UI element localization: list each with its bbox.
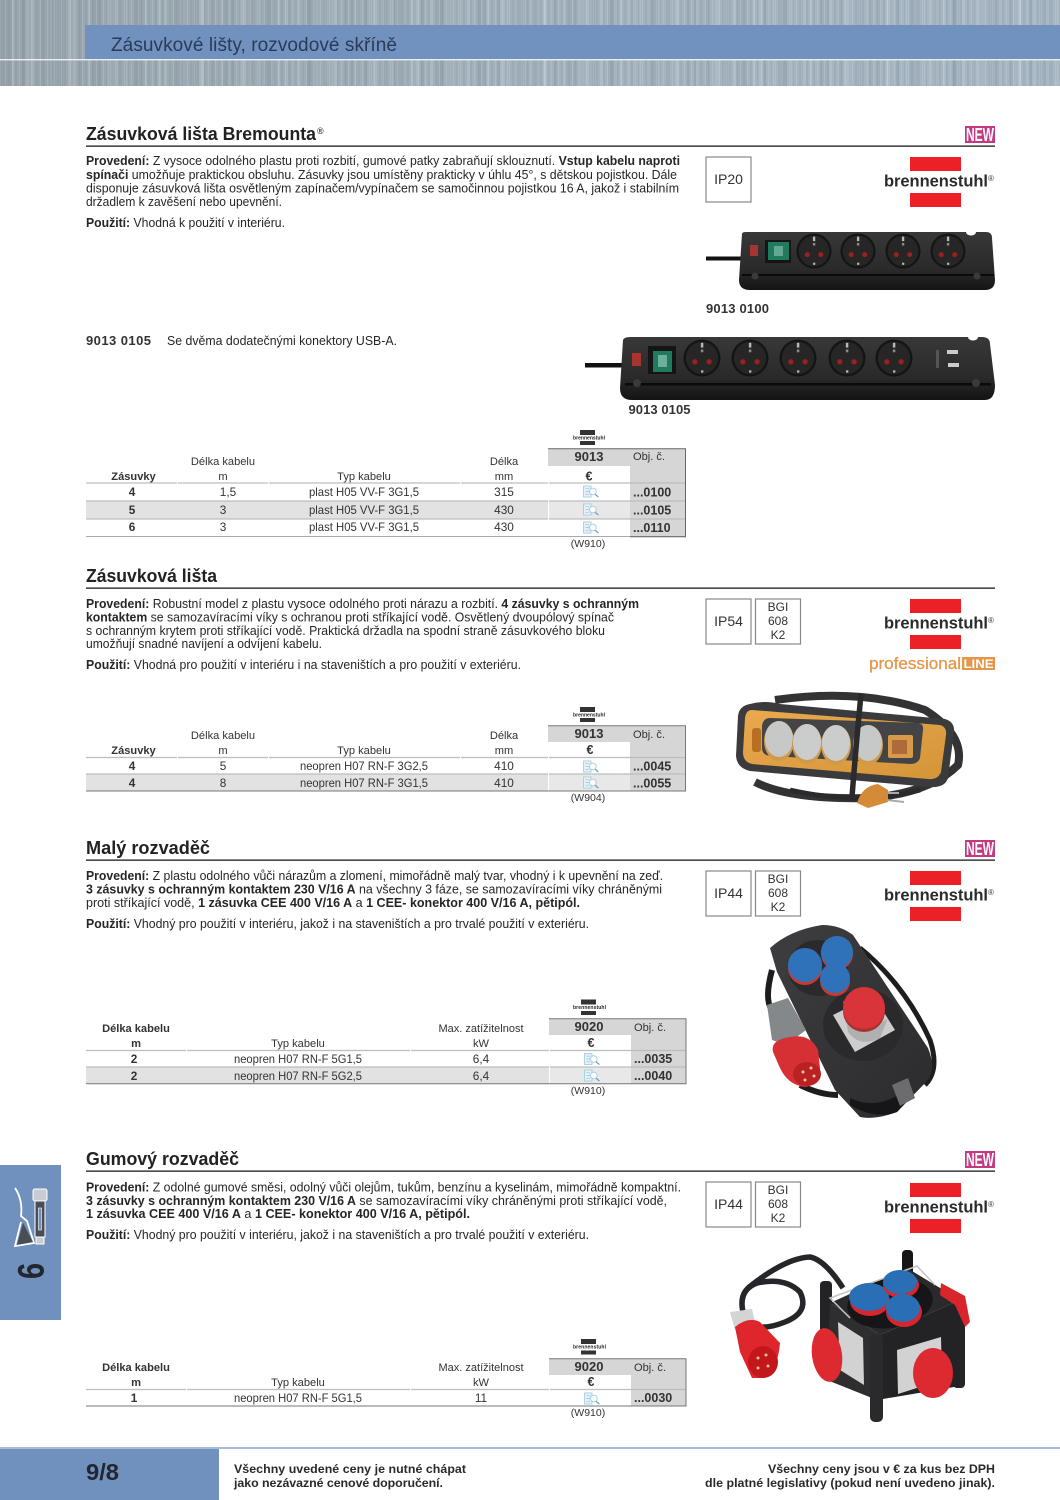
product code 9013 0105: 9013 0105: [628, 402, 690, 417]
table: Bremounta: 3: [220, 503, 227, 517]
heading: Bremounta: Zásuvková lišta Bremounta: [86, 124, 317, 144]
logo: brennenstuhl: [884, 599, 994, 649]
table: Gumový rozvaděč: Max. zatížitelnost: [438, 1362, 524, 1374]
heading: Malý rozvaděč: Malý rozvaděč: [86, 838, 210, 858]
badge: BGI 608 K2: K2: [771, 628, 786, 642]
table: Malý rozvaděč: (W910): [571, 1085, 605, 1097]
description text: Provedení: Z plastu odolného vůči nárazům a zlomení, mimořádně malý tvar, vhodný i k upevnění na zeď.: [86, 869, 663, 883]
product image: small distribution board: [767, 925, 934, 1118]
table: Zásuvková lišta: 4: [129, 776, 136, 790]
badge: BGI 608 K2: 608: [768, 886, 788, 900]
badge: IP44: [706, 871, 751, 916]
mini logo: [573, 1339, 607, 1354]
mini logo: brennenstuhl: [573, 1005, 607, 1011]
footer note left: jako nezávazné cenové doporučení.: [233, 1476, 443, 1490]
badge: IP54: IP54: [714, 613, 743, 629]
table: Bremounta: 3: [220, 520, 227, 534]
heading: Bremounta: [86, 124, 995, 147]
footer note right: dle platné legislativy (pokud není uvedeno jinak).: [705, 1476, 995, 1490]
table: Zásuvková lišta: 8: [220, 776, 227, 790]
badge: IP20: [706, 157, 751, 202]
description text: s ochranným krytem proti stříkající vodě. Praktická držadla na spodní straně zásuvkového bloku: [86, 624, 605, 638]
table: Bremounta: Zásuvky: [111, 471, 157, 483]
heading: Zásuvková lišta: Zásuvková lišta: [86, 566, 218, 586]
table: Bremounta: (W910): [571, 538, 605, 550]
page number box: [0, 1449, 219, 1500]
table: Zásuvková lišta: Délka kabelu: [191, 730, 255, 742]
table: Bremounta: plast H05 VV-F 3G1,5: [309, 520, 419, 534]
logo: professional LINE: professional: [869, 655, 961, 673]
badge: NEW: [965, 839, 995, 859]
description text: [86, 597, 639, 672]
table: Bremounta: Obj. č.: [633, 451, 665, 463]
sidebar tab: chapter 9: [0, 1165, 61, 1320]
product image: rubber distribution box: [730, 1250, 970, 1422]
description text: [86, 154, 680, 230]
section: Zásuvková lišta: [86, 566, 995, 808]
table: Gumový rozvaděč: 11: [475, 1391, 487, 1405]
table: Zásuvková lišta: (W904): [571, 792, 605, 804]
badge: NEW: [965, 125, 995, 145]
table: Bremounta: 430: [494, 503, 514, 517]
logo: brennenstuhl: [884, 871, 994, 921]
badge: NEW: NEW: [966, 1150, 994, 1170]
badge: NEW: NEW: [966, 839, 994, 859]
description text: proti stříkající vodě, 1 zásuvka CEE 400 V/16 A a 1 CEE- konektor 400 V/16 A, pětipól.: [86, 896, 580, 910]
logo: brennenstuhl: [884, 157, 994, 207]
badge: IP44: [706, 1182, 751, 1227]
table: Bremounta: 1,5: [220, 485, 237, 499]
table: Zásuvková lišta: 410: [494, 759, 514, 773]
badge: BGI 608 K2: BGI: [768, 600, 788, 614]
table: Bremounta: 6: [129, 520, 136, 534]
badge: IP44: IP44: [714, 885, 743, 901]
table: Zásuvková lišta: Typ kabelu: [337, 745, 391, 757]
table: Malý rozvaděč: ...0040: [634, 1069, 672, 1083]
table: Bremounta: 9013: [575, 449, 603, 464]
section: Malý rozvaděč: [86, 838, 995, 1118]
badge: BGI 608 K2: [756, 871, 800, 916]
footer note right: [705, 1462, 995, 1490]
description text: kontaktem se samozavíracími víky s ochranou proti stříkající vodě. Osvětlený dvoupólový spínač: [86, 610, 614, 624]
product image: 4-socket strip: [706, 228, 995, 290]
table: Bremounta: 315: [494, 485, 514, 499]
footer note left: [233, 1462, 466, 1490]
description text: umožňují snadné navíjení a odvíjení kabelu.: [86, 637, 322, 651]
table: Zásuvková lišta: 5: [220, 759, 227, 773]
table: Zásuvková lišta: 4: [129, 759, 136, 773]
badge: BGI 608 K2: [756, 1182, 800, 1227]
table: Bremounta: Typ kabelu: [337, 471, 391, 483]
logo: brennenstuhl: brennenstuhl: [884, 172, 988, 190]
table: Malý rozvaděč: neopren H07 RN-F 5G1,5: [234, 1052, 362, 1066]
badge: BGI 608 K2: BGI: [768, 1183, 788, 1197]
description text: Provedení: Z vysoce odolného plastu proti rozbití, gumové patky zabraňují sklouznutí. Vstup kabelu naproti: [86, 154, 680, 168]
table: Malý rozvaděč: Max. zatížitelnost: [438, 1023, 524, 1035]
description text: držadlem k zavěšení nebo upevnění.: [86, 195, 282, 209]
table: Malý rozvaděč: 2: [131, 1069, 138, 1083]
table: Gumový rozvaděč: kW: [473, 1377, 490, 1389]
table: Malý rozvaděč: €: [588, 1036, 595, 1050]
product code 9013 0100: 9013 0100: [706, 301, 769, 316]
description text: spínači umožňuje praktickou obsluhu. Zásuvky jsou umístěny prakticky v úhlu 45°, s dětskou pojistkou. Dále: [86, 168, 677, 182]
table: Bremounta: [86, 430, 686, 550]
logo: brennenstuhl: ®: [988, 888, 994, 897]
heading: Bremounta: ®: [317, 126, 324, 136]
table: Bremounta: 430: [494, 520, 514, 534]
table: Gumový rozvaděč: Obj. č.: [634, 1362, 666, 1374]
badge: IP44: IP44: [714, 1196, 743, 1212]
description text: [86, 869, 663, 931]
variant note: 9013 0105: [86, 333, 151, 348]
table: Gumový rozvaděč: 1: [131, 1391, 138, 1405]
table: Bremounta: Délka: [490, 456, 519, 468]
logo: brennenstuhl: ®: [988, 616, 994, 625]
variant note: Se dvěma dodatečnými konektory USB-A.: [167, 334, 397, 348]
table: Zásuvková lišta: Zásuvky: [111, 745, 157, 757]
table: Zásuvková lišta: neopren H07 RN-F 3G1,5: [300, 776, 428, 790]
badge: BGI 608 K2: K2: [771, 900, 786, 914]
description text: [86, 1180, 681, 1242]
table: Malý rozvaděč: 9020: [575, 1019, 603, 1034]
logo: brennenstuhl: brennenstuhl: [884, 886, 988, 904]
logo: professional LINE: LINE: [964, 657, 994, 671]
description text: Použití: Vhodná pro použití v interiéru i na staveništích a pro použití v exteriéru.: [86, 658, 521, 672]
badge: BGI 608 K2: 608: [768, 1197, 788, 1211]
footer: [0, 1447, 1060, 1500]
table: Zásuvková lišta: [86, 707, 686, 804]
description text: disponuje zásuvková lišta osvětleným zapínačem/vypínačem se samočinnou pojistkou 16 A, jakož i stabilním: [86, 182, 679, 196]
table: Malý rozvaděč: Obj. č.: [634, 1022, 666, 1034]
badge: BGI 608 K2: [756, 599, 800, 644]
footer note left: Všechny uvedené ceny je nutné chápat: [234, 1462, 466, 1476]
table: Bremounta: Délka kabelu: [191, 456, 255, 468]
mini logo: brennenstuhl: [573, 436, 606, 442]
mini logo: [573, 707, 606, 722]
table: Malý rozvaděč: [86, 1000, 686, 1097]
description text: Použití: Vhodný pro použití v interiéru, jakož i na staveništích a pro trvalé použití v exteriéru.: [86, 917, 589, 931]
table: Bremounta: ...0100: [633, 486, 671, 500]
badge: BGI 608 K2: 608: [768, 614, 788, 628]
logo: brennenstuhl: brennenstuhl: [884, 1198, 988, 1216]
mini logo: [573, 430, 606, 445]
variant note: [86, 333, 397, 348]
table: Gumový rozvaděč: ...0030: [634, 1391, 672, 1405]
table: Zásuvková lišta: mm: [495, 745, 513, 757]
table: Bremounta: plast H05 VV-F 3G1,5: [309, 503, 419, 517]
header title bar: [85, 25, 1060, 59]
section: Zásuvková lišta Bremounta: [86, 124, 995, 550]
table: Malý rozvaděč: 6,4: [473, 1052, 490, 1066]
table: Malý rozvaděč: Typ kabelu: [271, 1038, 325, 1050]
table: Zásuvková lišta: ...0045: [633, 760, 671, 774]
table: Gumový rozvaděč: 9020: [575, 1359, 603, 1374]
table: Malý rozvaděč: Délka kabelu: [102, 1023, 170, 1035]
table: Gumový rozvaděč: €: [588, 1375, 595, 1389]
description text: 1 zásuvka CEE 400 V/16 A a 1 CEE- konektor 400 V/16 A, pětipól.: [86, 1207, 470, 1221]
table: Bremounta: m: [218, 471, 228, 483]
table: Bremounta: ...0105: [633, 504, 671, 518]
logo: brennenstuhl: brennenstuhl: [884, 614, 988, 632]
description text: Použití: Vhodný pro použití v interiéru, jakož i na staveništích a pro trvalé použití v exteriéru.: [86, 1228, 589, 1242]
table: Gumový rozvaděč: [86, 1339, 686, 1419]
mini logo: brennenstuhl: [573, 712, 606, 718]
table: Zásuvková lišta: 410: [494, 776, 514, 790]
table: Gumový rozvaděč: (W910): [571, 1407, 605, 1419]
table: Malý rozvaděč: m: [131, 1038, 141, 1050]
chapter number: 9: [10, 1263, 51, 1279]
badge: IP54: [706, 599, 751, 644]
table: Zásuvková lišta: Délka: [490, 730, 519, 742]
table: Gumový rozvaděč: m: [131, 1377, 141, 1389]
header title bar: Zásuvkové lišty, rozvodové skříně: [111, 35, 397, 56]
table: Zásuvková lišta: Obj. č.: [633, 729, 665, 741]
table: Bremounta: 5: [129, 503, 136, 517]
table: Gumový rozvaděč: Typ kabelu: [271, 1377, 325, 1389]
table: Zásuvková lišta: 9013: [575, 726, 603, 741]
mini logo: [573, 1000, 607, 1015]
table: Bremounta: mm: [495, 471, 513, 483]
logo: brennenstuhl: ®: [988, 174, 994, 183]
table: Bremounta: 4: [129, 485, 136, 499]
table: Bremounta: €: [586, 470, 593, 484]
badge: NEW: [965, 1150, 995, 1170]
icon: caulking gun and flashlight: [15, 1188, 47, 1246]
product image: 5-socket strip with USB: [585, 334, 995, 400]
table: Zásuvková lišta: €: [587, 743, 594, 757]
description text: Provedení: Z odolné gumové směsi, odolný vůči olejům, tukům, benzínu a kyselinám, mimořádně kompaktní.: [86, 1180, 681, 1194]
table: Zásuvková lišta: ...0055: [633, 776, 671, 790]
table: Malý rozvaděč: 6,4: [473, 1069, 490, 1083]
description text: Provedení: Robustní model z plastu vysoce odolného proti nárazu a rozbití. 4 zásuvky s ochranným: [86, 597, 639, 611]
table: Zásuvková lišta: m: [218, 745, 228, 757]
badge: BGI 608 K2: BGI: [768, 872, 788, 886]
table: Gumový rozvaděč: neopren H07 RN-F 5G1,5: [234, 1391, 362, 1405]
product image: rubber socket block: [736, 694, 959, 808]
table: Gumový rozvaděč: Délka kabelu: [102, 1362, 170, 1374]
badge: NEW: NEW: [966, 125, 994, 145]
page number box: 9/8: [86, 1459, 119, 1485]
heading: Gumový rozvaděč: Gumový rozvaděč: [86, 1149, 239, 1169]
footer note right: Všechny ceny jsou v € za kus bez DPH: [768, 1462, 995, 1476]
section: Gumový rozvaděč: [86, 1149, 995, 1422]
description text: Použití: Vhodná k použití v interiéru.: [86, 216, 285, 230]
table: Malý rozvaděč: neopren H07 RN-F 5G2,5: [234, 1069, 362, 1083]
mini logo: brennenstuhl: [573, 1344, 607, 1350]
logo: brennenstuhl: [884, 1183, 994, 1233]
description text: 3 zásuvky s ochranným kontaktem 230 V/16 A se samozavíracími víky chráněnými proti stříkající vodě,: [86, 1194, 667, 1208]
table: Malý rozvaděč: 2: [131, 1052, 138, 1066]
table: Bremounta: plast H05 VV-F 3G1,5: [309, 485, 419, 499]
logo: brennenstuhl: ®: [988, 1200, 994, 1209]
table: Zásuvková lišta: neopren H07 RN-F 3G2,5: [300, 759, 428, 773]
table: Malý rozvaděč: ...0035: [634, 1052, 672, 1066]
header texture band: [0, 0, 1060, 86]
table: Malý rozvaděč: kW: [473, 1038, 490, 1050]
description text: 3 zásuvky s ochranným kontaktem 230 V/16 A na všechny 3 fáze, se samozavíracími víky chráněnými: [86, 882, 662, 896]
table: Bremounta: ...0110: [633, 521, 671, 535]
badge: IP20: IP20: [714, 171, 743, 187]
badge: BGI 608 K2: K2: [771, 1211, 786, 1225]
